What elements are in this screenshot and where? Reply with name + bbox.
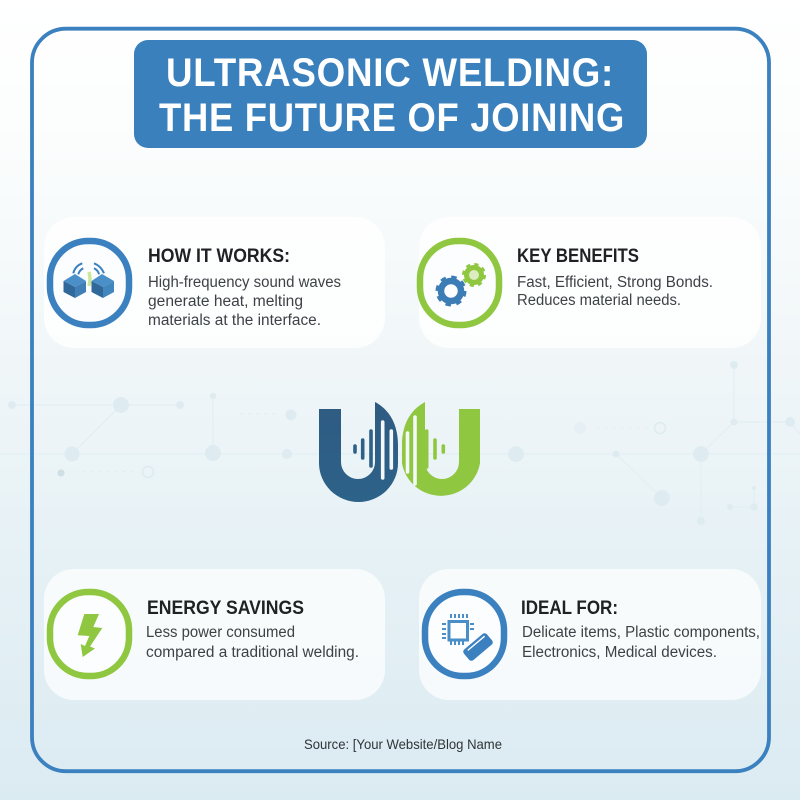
body: energy savings: Less power consumed (146, 624, 295, 641)
body: key benefits: Fast, Efficient, Strong Bonds. (517, 274, 713, 291)
body: key benefits: Reduces material needs. (517, 292, 681, 309)
icon: ultrasonic cubes (50, 241, 129, 325)
body: how it works: High-frequency sound waves (148, 274, 341, 291)
heading: ideal for: IDEAL FOR: (521, 597, 618, 619)
body: energy savings: compared a traditional welding. (146, 644, 359, 661)
title text (159, 51, 625, 140)
panel: key benefits (419, 217, 761, 348)
title text: ULTRASONIC WELDING: (166, 51, 614, 95)
body: ideal for: Electronics, Medical devices. (522, 644, 717, 661)
body: ideal for (522, 624, 760, 661)
icon: microchip and component (425, 592, 504, 676)
source note: Source: [Your Website/Blog Name (304, 736, 502, 752)
body: energy savings (146, 624, 359, 661)
body: how it works (148, 274, 341, 329)
heading: how it works: HOW IT WORKS: (148, 245, 290, 267)
central logo: double U with sound wave (319, 402, 480, 502)
title text: THE FUTURE OF JOINING (159, 96, 625, 140)
body: key benefits (517, 274, 713, 309)
panel: ideal for (419, 569, 761, 700)
body: how it works: generate heat, melting (148, 293, 303, 310)
panel: how it works (44, 217, 385, 348)
icon: gears (420, 241, 499, 325)
panel: energy savings (44, 569, 385, 700)
body: how it works: materials at the interface. (148, 312, 321, 329)
heading: energy savings: ENERGY SAVINGS (147, 597, 304, 619)
title banner (134, 40, 647, 148)
background circuit network (0, 361, 800, 525)
body: ideal for: Delicate items, Plastic components, (522, 624, 760, 641)
icon: lightning bolt (50, 592, 129, 676)
heading: key benefits: KEY BENEFITS (517, 245, 639, 267)
